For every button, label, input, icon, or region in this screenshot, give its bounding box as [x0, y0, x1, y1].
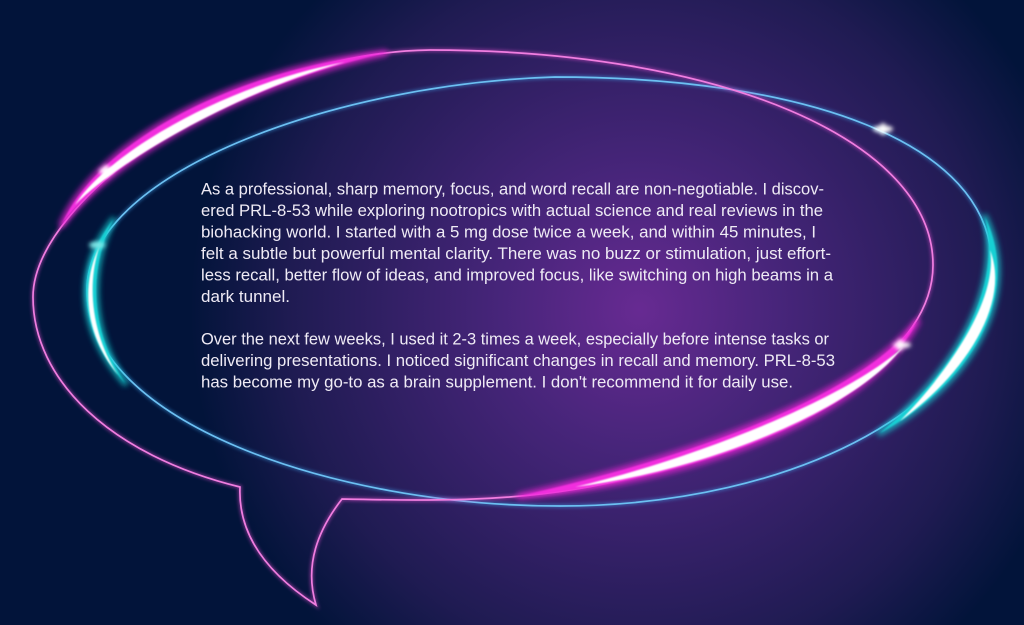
paragraph one: biohacking world. I started with a 5 mg dose twice a week, and within 45 minutes, I	[201, 224, 816, 242]
magenta glow streak: top left	[62, 53, 385, 224]
magenta glow streak: bottom right	[520, 322, 917, 496]
pink speech bubble outline with tail	[33, 50, 933, 605]
paragraph one: dark tunnel.	[201, 288, 290, 306]
testimonial text	[201, 180, 835, 392]
cyan glow streak: right	[880, 217, 998, 433]
paragraph two	[201, 330, 835, 392]
cyan glow streak: left	[86, 220, 125, 383]
paragraph two: Over the next few weeks, I used it 2-3 times a week, especially before intense tasks or	[201, 330, 830, 348]
paragraph one: ered PRL-8-53 while exploring nootropics with actual science and real reviews in the	[201, 202, 823, 220]
paragraph one: less recall, better flow of ideas, and improved focus, like switching on high beams in a	[201, 266, 834, 284]
paragraph two: has become my go-to as a brain supplement. I don't recommend it for daily use.	[201, 374, 793, 392]
paragraph two: delivering presentations. I noticed significant changes in recall and memory. PRL-8-53	[201, 352, 835, 370]
paragraph one	[201, 180, 834, 306]
blue oval outline	[87, 77, 992, 506]
sparkle highlights	[89, 123, 911, 351]
paragraph one: felt a subtle but powerful mental clarity. There was no buzz or stimulation, just effort-	[201, 245, 831, 263]
paragraph one: As a professional, sharp memory, focus, and word recall are non-negotiable. I discov-	[201, 180, 824, 198]
